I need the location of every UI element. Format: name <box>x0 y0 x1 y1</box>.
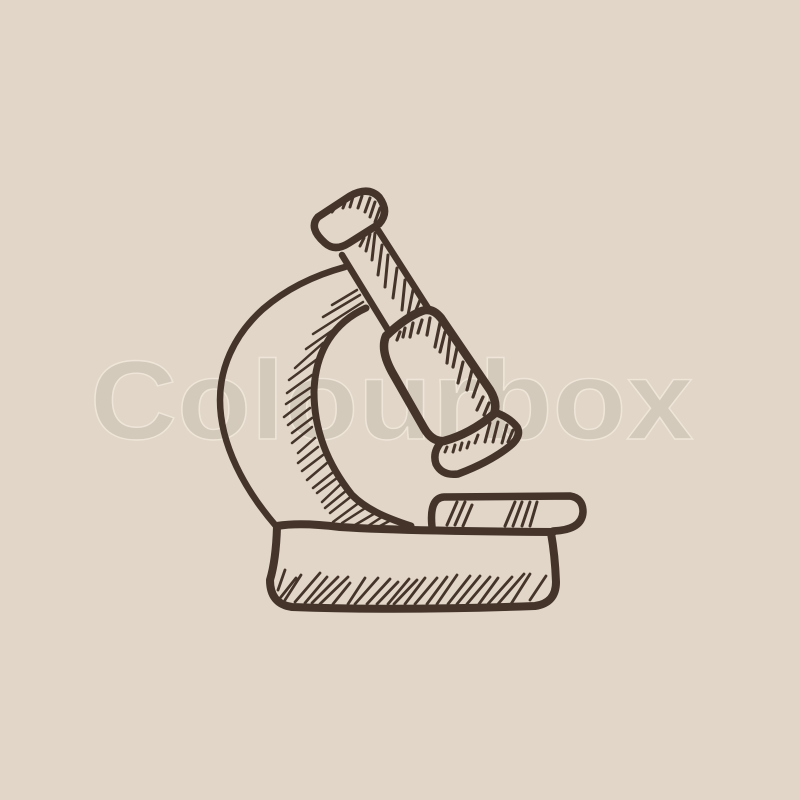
arm outer curve <box>220 267 345 526</box>
lens shading <box>445 422 513 452</box>
watermark: Colourbox: Colourbox <box>90 338 694 463</box>
arm shading <box>284 290 393 526</box>
arm inner curve <box>314 308 411 526</box>
slide shading <box>447 502 537 526</box>
objective body <box>384 310 495 441</box>
eyepiece tube <box>342 230 428 330</box>
base <box>270 524 556 609</box>
eyepiece cap <box>314 191 384 248</box>
cap shading <box>332 196 380 222</box>
slide <box>432 496 583 531</box>
icon: microscope <box>220 191 583 609</box>
objective shading <box>397 318 489 415</box>
base shading <box>277 570 546 604</box>
tube shading <box>360 233 420 315</box>
objective lens holder <box>435 413 518 474</box>
